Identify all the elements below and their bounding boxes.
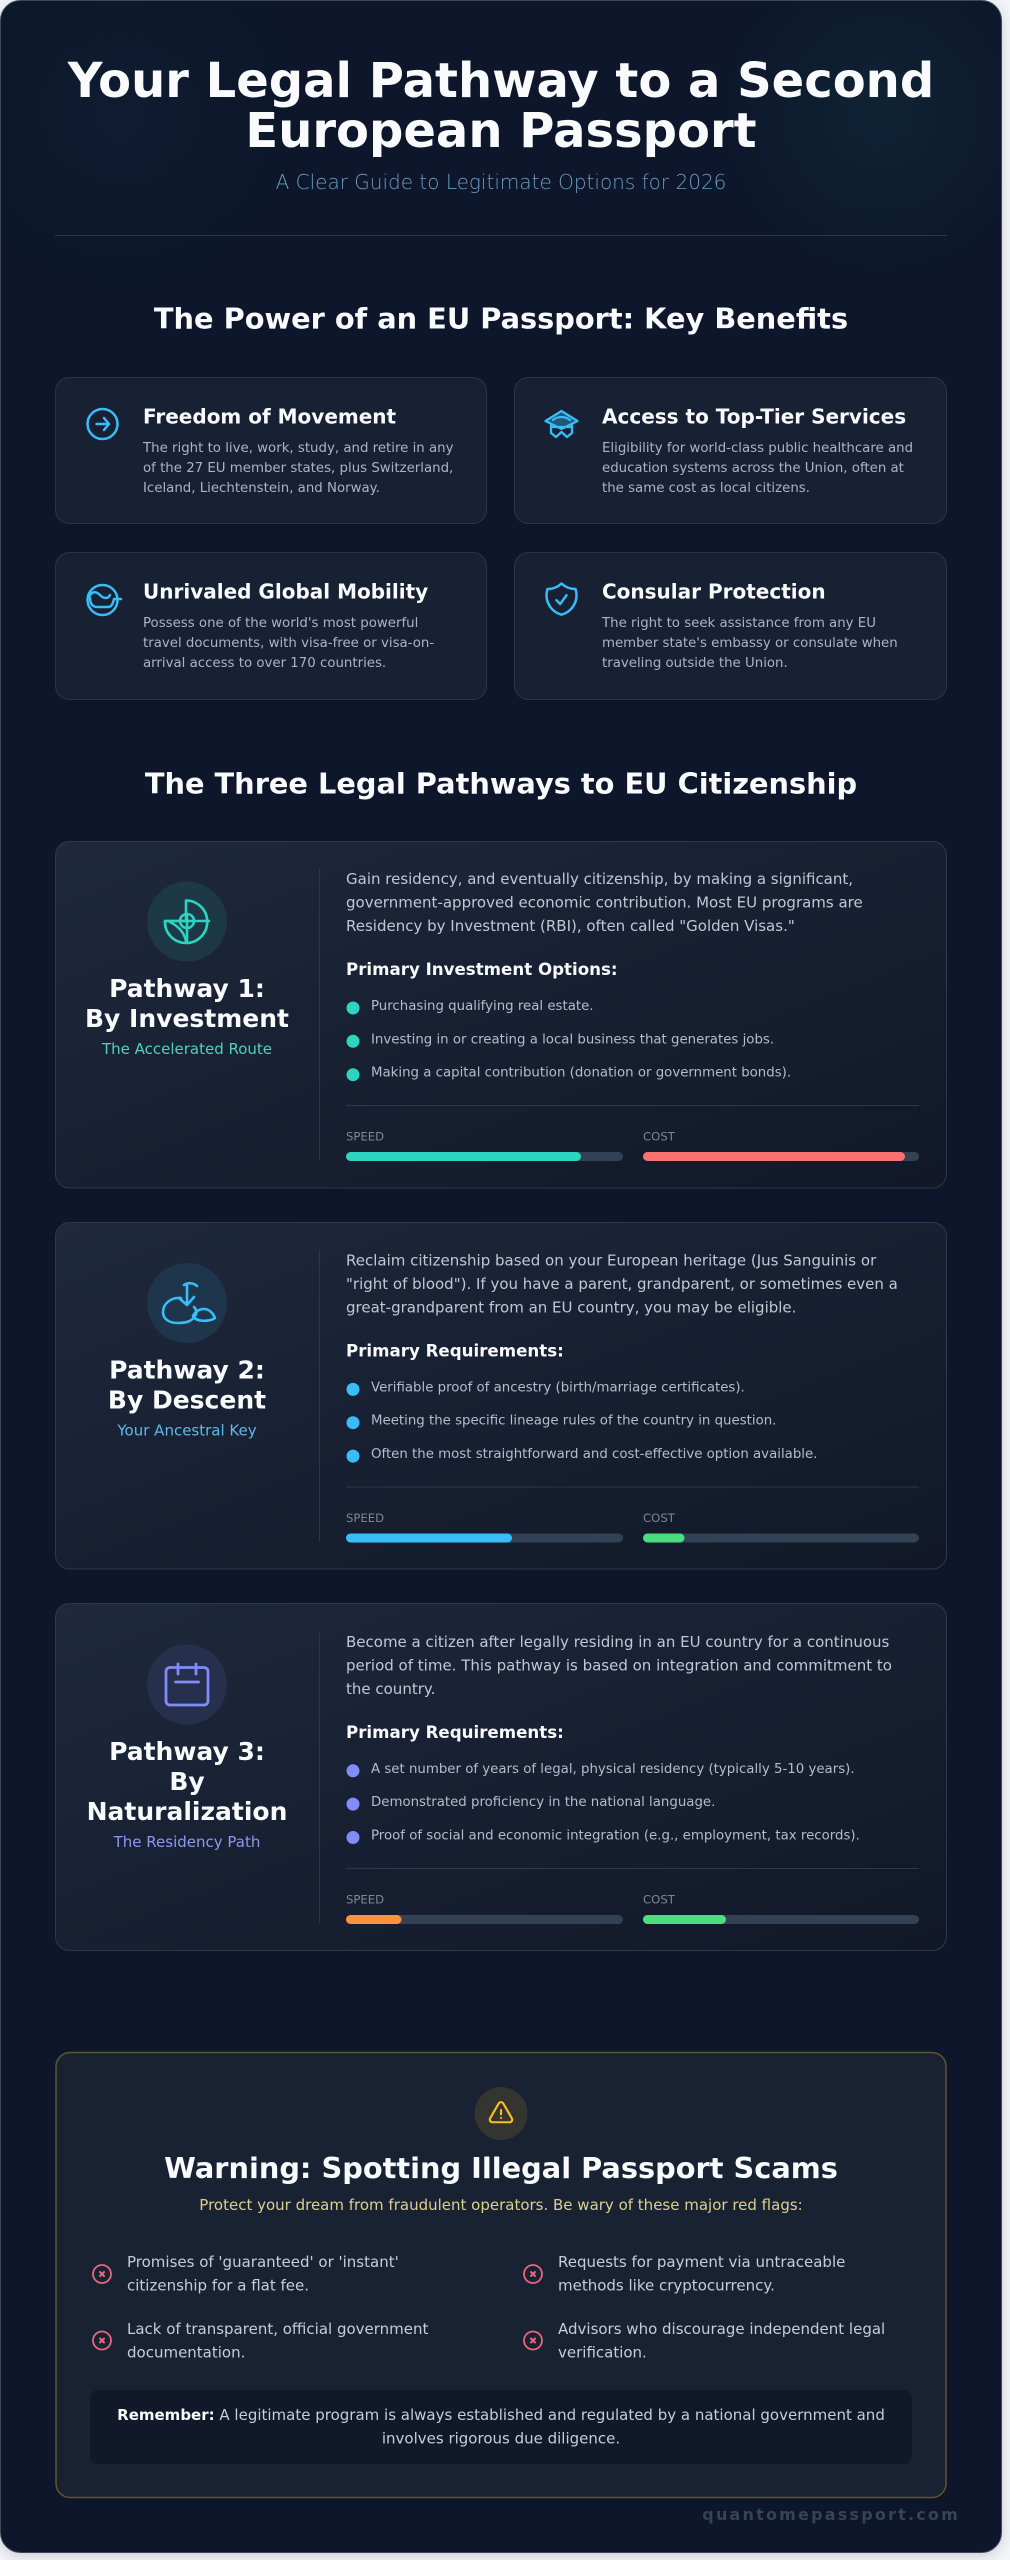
speed bar: SPEED: [346, 1892, 384, 1906]
callout: remember: [90, 2390, 912, 2464]
panel: pathway 1: Primary Investment Options:: [346, 960, 618, 979]
list: Making a capital contribution (donation or government bonds).: [371, 1066, 791, 1081]
panel: pathway 2: "right of blood"). If you have a parent, grandparent, or sometimes even a: [346, 1275, 898, 1293]
icon: descent: [163, 1283, 215, 1323]
cost bar: COST: [643, 1130, 676, 1144]
panel: freedom of movement: Freedom of Movement: [143, 404, 397, 428]
panel: global mobility: arrival access to over 170 countries.: [143, 656, 386, 671]
cost bar: [643, 1130, 919, 1161]
title: [67, 53, 934, 159]
list: Meeting the specific lineage rules of the country in question.: [371, 1414, 776, 1429]
panel: pathway 3: The Residency Path: [113, 1833, 260, 1851]
panel: consular protection: member state's embassy or consulate when: [602, 636, 898, 651]
panel: pathway 1: Pathway 1:: [109, 974, 265, 1003]
icon: calendar: [166, 1664, 208, 1705]
panel: global mobility: Unrivaled Global Mobility: [143, 580, 428, 604]
cost bar: COST: [643, 1511, 676, 1525]
callout: remember: Remember: A legitimate program is always established and regulated by a national government and: [117, 2406, 885, 2424]
panel: access to services: [514, 378, 946, 524]
icon: x circle: [93, 2332, 111, 2350]
panel: global mobility: [56, 552, 486, 700]
icon: x circle: [524, 2332, 542, 2350]
panel: warning: Requests for payment via untraceable: [558, 2253, 845, 2271]
panel: pathway 3: By: [169, 1767, 205, 1796]
panel: pathway 2: Reclaim citizenship based on your European heritage (Jus Sanguinis or: [346, 1252, 877, 1270]
speed bar: [346, 1892, 623, 1924]
panel: pathway 3: the country.: [346, 1680, 435, 1698]
panel: pathway 2: Primary Requirements:: [346, 1342, 564, 1360]
heading: key benefits: The Power of an EU Passport: Key Benefits: [154, 302, 848, 336]
speed bar: SPEED: [346, 1511, 384, 1525]
panel: pathway 3: Become a citizen after legally residing in an EU country for a continuous: [346, 1633, 890, 1651]
heading: three pathways: The Three Legal Pathways to EU Citizenship: [145, 766, 857, 800]
panel: pathway 1: By Investment: [85, 1004, 289, 1033]
icon: warning triangle: [490, 2102, 512, 2122]
panel: consular protection: [514, 552, 946, 700]
icon: x circle: [524, 2265, 542, 2283]
panel: warning: Lack of transparent, official government: [127, 2320, 429, 2338]
list: Purchasing qualifying real estate.: [371, 999, 594, 1014]
icon: x circle: [93, 2265, 111, 2283]
panel: warning: methods like cryptocurrency.: [558, 2276, 775, 2294]
panel: pathway 3: Pathway 3:: [109, 1737, 265, 1766]
cost bar: [643, 1892, 919, 1924]
icon: shield check: [547, 584, 577, 615]
panel: pathway 1: government-approved economic contribution. Most EU programs are: [346, 894, 863, 912]
panel: global mobility: travel documents, with visa-free or visa-on-: [143, 636, 434, 651]
panel: warning: Warning: Spotting Illegal Passport Scams: [164, 2151, 838, 2185]
title: European Passport: [245, 103, 757, 159]
list: A set number of years of legal, physical residency (typically 5-10 years).: [371, 1762, 855, 1777]
title: Your Legal Pathway to a Second: [67, 53, 934, 109]
panel: freedom of movement: The right to live, work, study, and retire in any: [142, 441, 454, 456]
panel: warning: verification.: [558, 2344, 647, 2362]
panel: pathway 3: [56, 1604, 946, 1950]
panel: access to services: education systems across the Union, often at: [602, 461, 904, 476]
list: [346, 1380, 817, 1463]
callout: remember: involves rigorous due diligence.: [382, 2430, 620, 2448]
panel: access to services: the same cost as local citizens.: [602, 481, 810, 496]
panel: freedom of movement: of the 27 EU member states, plus Switzerland,: [143, 461, 453, 476]
icon: investment: [165, 900, 209, 943]
panel: warning: documentation.: [127, 2344, 245, 2362]
icon: arrow circle: [88, 409, 118, 439]
panel: pathway 3: Naturalization: [87, 1797, 287, 1826]
panel: consular protection: The right to seek assistance from any EU: [601, 616, 876, 631]
list: Verifiable proof of ancestry (birth/marriage certificates).: [371, 1380, 745, 1395]
speed bar: [346, 1511, 623, 1542]
panel: pathway 1: [56, 842, 946, 1188]
panel: warning: Advisors who discourage independent legal: [558, 2320, 885, 2338]
panel: pathway 2: Your Ancestral Key: [116, 1422, 257, 1440]
panel: pathway 3: Primary Requirements:: [346, 1723, 564, 1742]
panel: pathway 2: great-grandparent from an EU country, you may be eligible.: [346, 1298, 796, 1316]
list: Demonstrated proficiency in the national language.: [371, 1795, 715, 1810]
panel: consular protection: traveling outside the Union.: [602, 656, 788, 671]
panel: warning: Promises of 'guaranteed' or 'instant': [127, 2253, 399, 2271]
panel: pathway 2: Pathway 2:: [109, 1356, 265, 1384]
icon: graduation cap: [546, 411, 578, 437]
footer brand: quantomepassport.com: [702, 2505, 960, 2524]
list: Often the most straightforward and cost-effective option available.: [371, 1447, 817, 1462]
cost bar: COST: [643, 1892, 676, 1906]
panel: access to services: Eligibility for world-class public healthcare and: [602, 441, 913, 456]
panel: warning: Protect your dream from fraudulent operators. Be wary of these major red flags:: [199, 2196, 803, 2214]
panel: global mobility: Possess one of the world's most powerful: [143, 616, 418, 631]
panel: freedom of movement: [56, 378, 486, 524]
panel: pathway 1: Residency by Investment (RBI), often called "Golden Visas.": [346, 917, 795, 935]
cost bar: [643, 1511, 919, 1542]
speed bar: SPEED: [346, 1130, 384, 1144]
panel: pathway 2: [56, 1222, 946, 1569]
panel: pathway 1: Gain residency, and eventually citizenship, by making a significant,: [346, 870, 853, 888]
list: Proof of social and economic integration (e.g., employment, tax records).: [371, 1828, 860, 1844]
panel: warning: citizenship for a flat fee.: [127, 2276, 309, 2294]
panel: freedom of movement: Iceland, Liechtenstein, and Norway.: [143, 481, 380, 496]
panel: consular protection: Consular Protection: [602, 580, 826, 604]
panel: pathway 3: period of time. This pathway is based on integration and commitment to: [346, 1656, 892, 1674]
icon: globe with wave: [88, 585, 121, 615]
list: [346, 1762, 860, 1844]
list: [346, 999, 791, 1081]
panel: access to services: Access to Top-Tier Services: [602, 404, 906, 428]
panel: pathway 2: By Descent: [108, 1386, 266, 1414]
list: Investing in or creating a local business that generates jobs.: [371, 1032, 774, 1047]
panel: pathway 1: The Accelerated Route: [101, 1040, 272, 1058]
speed bar: [346, 1130, 623, 1161]
subtitle: A Clear Guide to Legitimate Options for 2026: [276, 170, 726, 194]
panel: warning: [56, 2052, 946, 2498]
